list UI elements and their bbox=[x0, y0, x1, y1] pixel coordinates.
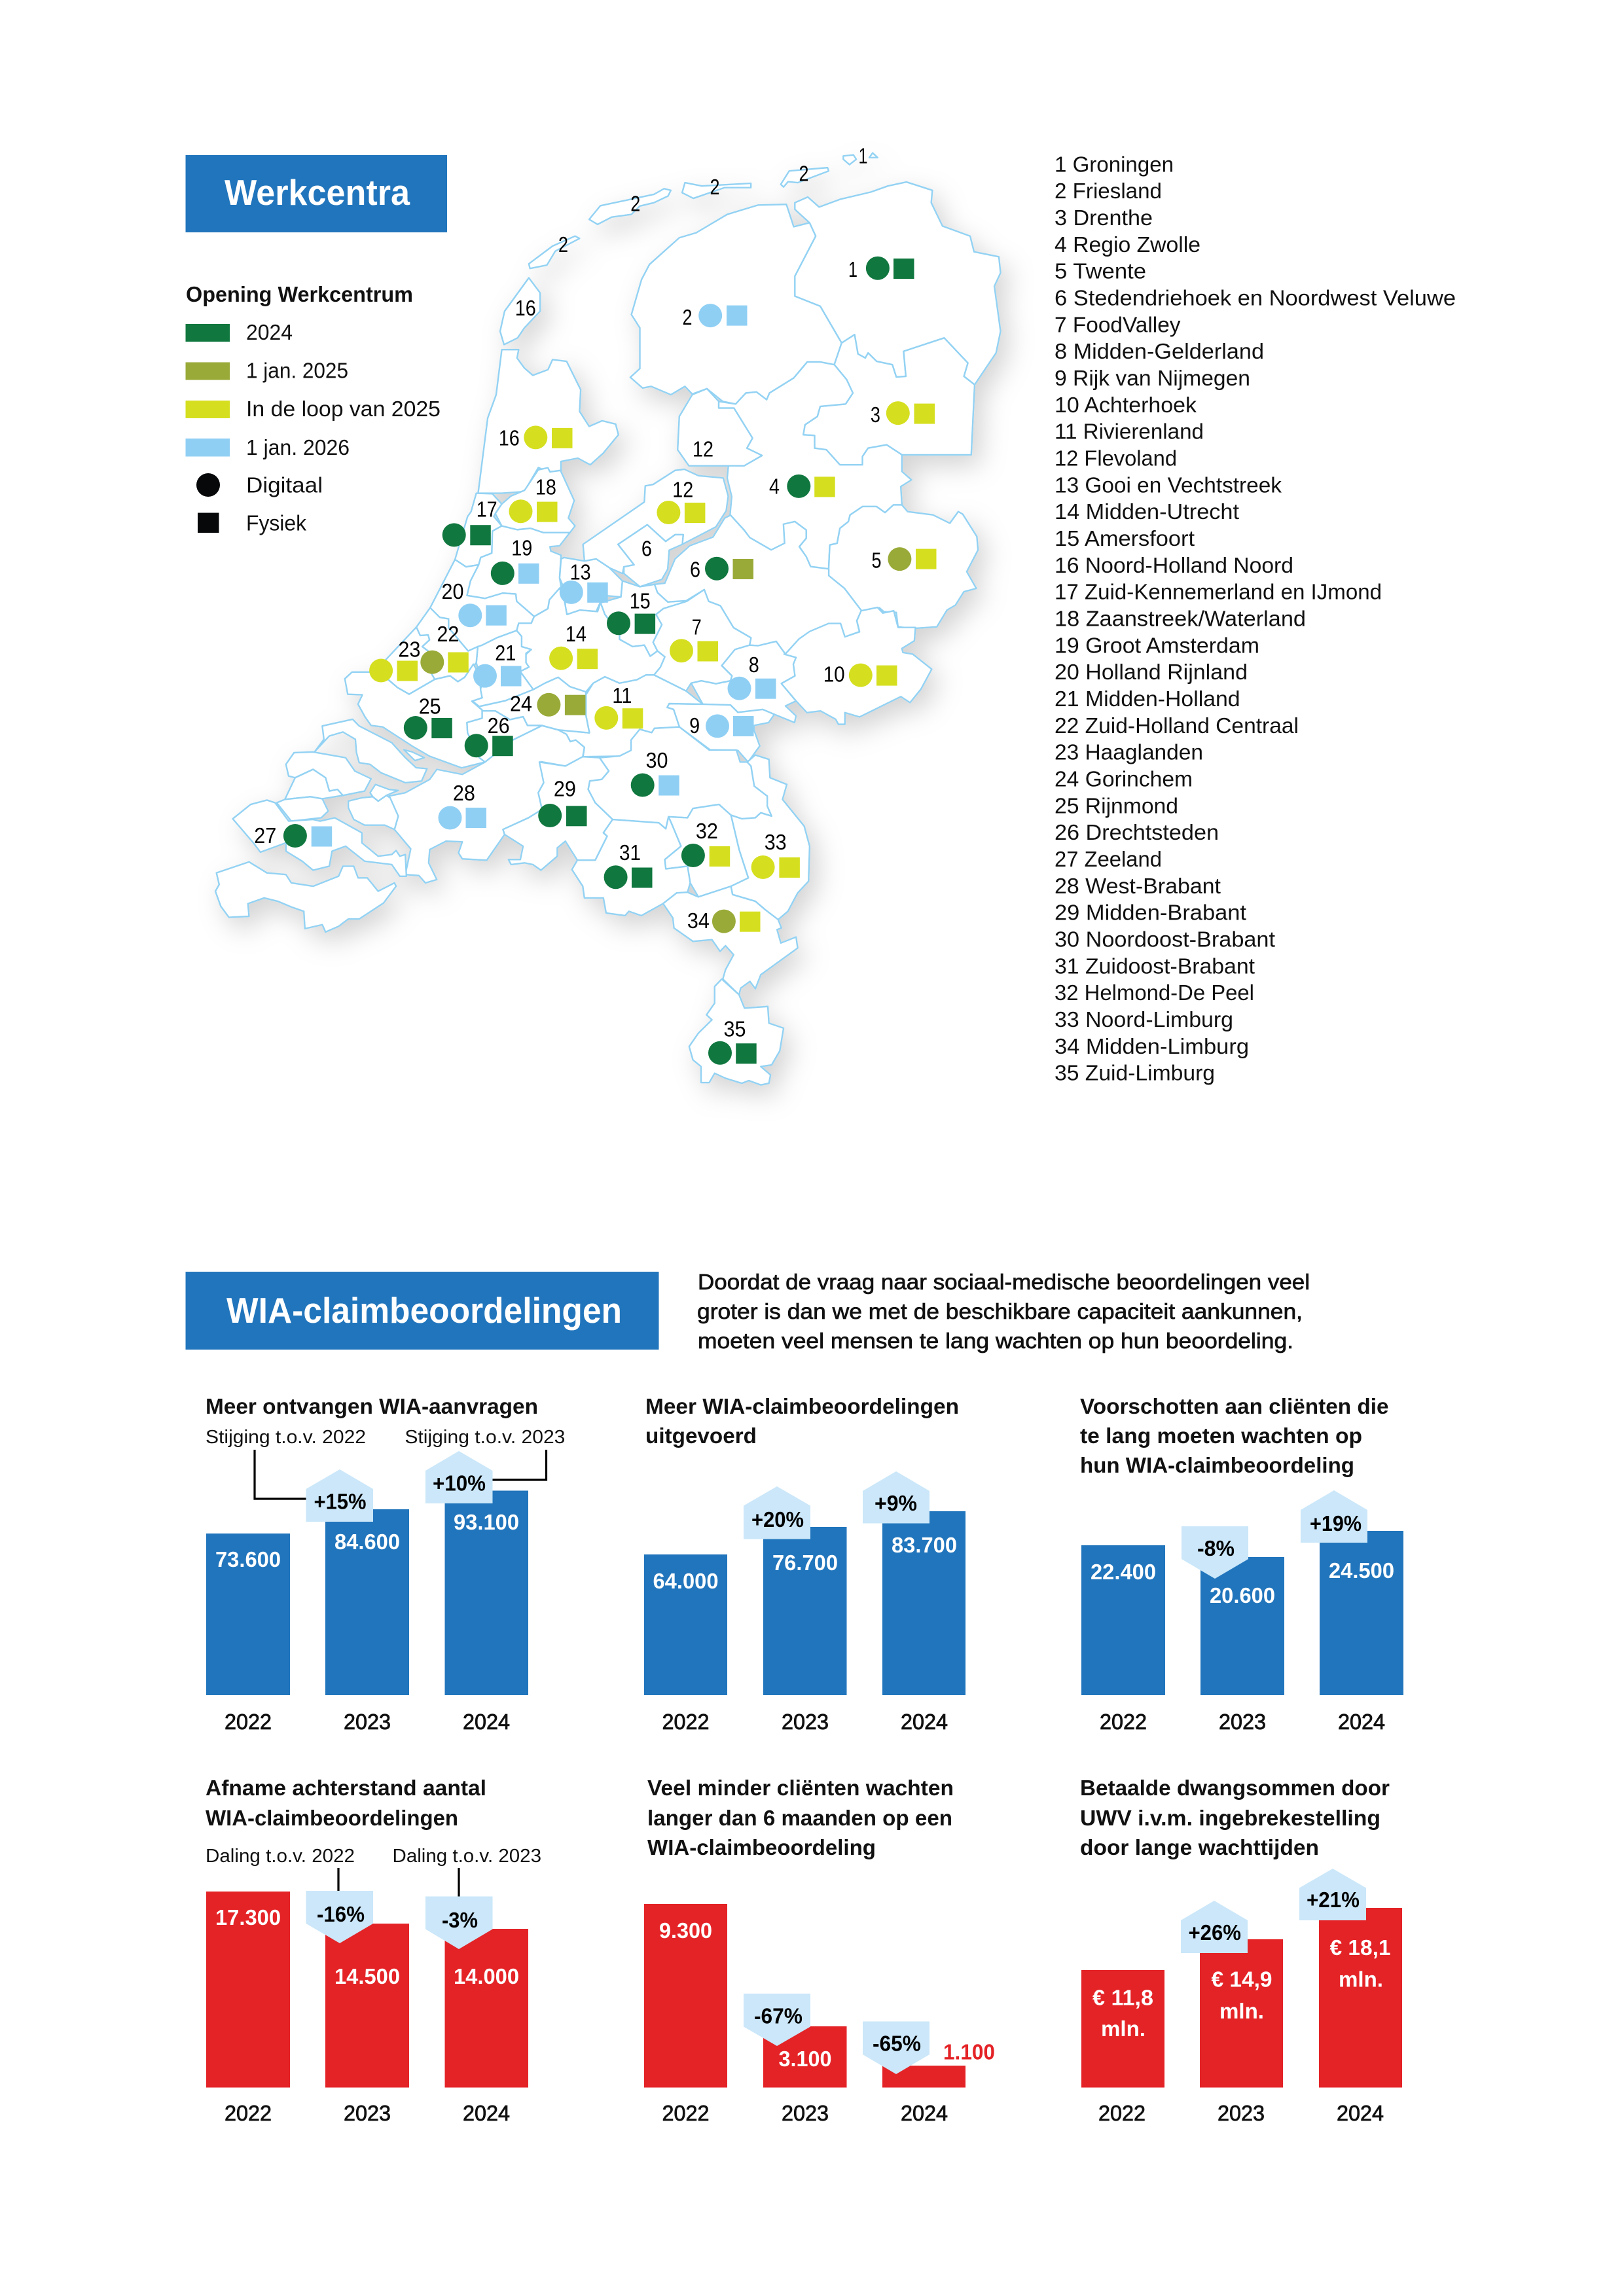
chart: Voorschotten aan cliënten: 20.600 bbox=[1210, 1583, 1275, 1607]
chart: Veel minder cliënten wachten langer dan 6 maanden: 2022 bbox=[662, 2101, 710, 2125]
chart: Afname achterstand aantal WIA-claimbeoordelingen: Daling t.o.v. 2022 bbox=[206, 1846, 355, 1867]
region: Flevoland zuid bbox=[583, 469, 729, 573]
numbered list of regions: 4 Regio Zwolle bbox=[1055, 232, 1200, 257]
marker 20 Holland Rijnland: 20 bbox=[441, 579, 463, 603]
marker 23 Haaglanden bbox=[369, 637, 420, 682]
region: Drenthe bbox=[803, 334, 975, 465]
chart: Voorschotten aan cliënten: 2024 bbox=[1338, 1710, 1385, 1734]
chart: Veel minder cliënten wachten langer dan 6 maanden: 3.100 bbox=[779, 2047, 831, 2071]
chart: Betaalde dwangsommen door UWV: 2022 bbox=[1098, 2101, 1146, 2125]
numbered list of regions: 3 Drenthe bbox=[1055, 206, 1153, 230]
region: Noord-Beveland bbox=[285, 770, 343, 799]
chart: Voorschotten aan cliënten: 2023 bbox=[1219, 1710, 1266, 1734]
region: Midden-Utrecht bbox=[516, 588, 665, 692]
map of the Netherlands: regions bbox=[215, 153, 1001, 1085]
numbered list of regions: 28 West-Brabant bbox=[1055, 874, 1221, 898]
numbered list of regions: 18 Zaanstreek/Waterland bbox=[1055, 606, 1306, 631]
numbered list of regions: 7 FoodValley bbox=[1055, 312, 1181, 336]
region: FoodValley bbox=[653, 590, 751, 691]
marker 30 Noordoost-Brabant bbox=[631, 748, 679, 797]
marker 5 Twente: 5 bbox=[872, 548, 881, 572]
marker 4 Regio Zwolle: 4 bbox=[769, 474, 780, 499]
marker 2 Friesland bbox=[682, 304, 748, 329]
chart: Betaalde dwangsommen door UWV: UWV i.v.m. ingebrekestelling bbox=[1080, 1806, 1380, 1830]
legend: Opening Werkcentrum: Fysiek bbox=[246, 511, 306, 535]
marker 3 Drenthe bbox=[871, 401, 935, 427]
legend: Opening Werkcentrum: 1 jan. 2026 bbox=[246, 435, 350, 459]
island labels: 1 and 2: 1 bbox=[859, 144, 868, 168]
region: Stedendriehoek, westelijk deel bbox=[618, 525, 683, 586]
numbered list of regions bbox=[1055, 152, 1456, 1085]
chart: Afname achterstand aantal WIA-claimbeoordelingen: 14.000 bbox=[454, 1964, 519, 1988]
region: Groot Amsterdam bbox=[467, 526, 570, 617]
region: Zuid-Limburg bbox=[689, 979, 784, 1085]
marker 17 Zuid-Kennemerland en IJmond: 17 bbox=[477, 497, 497, 521]
chart: Meer ontvangen WIA-aanvragen: +15% bbox=[314, 1490, 367, 1514]
chart: Betaalde dwangsommen door UWV: +26% bbox=[1189, 1920, 1241, 1945]
island: Vlieland bbox=[529, 236, 579, 268]
legend: Opening Werkcentrum: In de loop van 2025 bbox=[246, 397, 441, 421]
region: Midden-Holland bbox=[472, 630, 533, 706]
region: Flevoland noord bbox=[677, 389, 762, 466]
marker 25 Rijnmond: 25 bbox=[419, 694, 441, 719]
marker 33 Noord-Limburg: 33 bbox=[765, 830, 787, 854]
region: Rijk van Nijmegen bbox=[667, 704, 774, 762]
region: Sint Philipsland bbox=[370, 784, 398, 801]
island: Ameland bbox=[682, 183, 751, 198]
marker 22 Zuid-Holland Centraal bbox=[420, 622, 469, 674]
marker 1 Groningen: 1 bbox=[848, 257, 857, 281]
intro text: Doordat de vraag naar sociaal-medische beoordelingen veel bbox=[698, 1270, 1310, 1294]
chart: Veel minder cliënten wachten langer dan 6 maanden: 1.100 bbox=[943, 2040, 995, 2064]
chart: Betaalde dwangsommen door UWV: door lange wachttijden bbox=[1080, 1835, 1319, 1859]
marker 24 Gorinchem bbox=[510, 692, 585, 717]
heading: Werkcentra: Werkcentra bbox=[225, 172, 410, 213]
region: Zuid-Holland Centraal bbox=[416, 608, 478, 682]
marker 25 Rijnmond bbox=[404, 694, 452, 740]
chart: Afname achterstand aantal WIA-claimbeoordelingen: -3% bbox=[442, 1908, 478, 1932]
marker 13 Gooi en Vechtstreek: 13 bbox=[570, 560, 591, 584]
marker 26 Drechtsteden bbox=[465, 713, 513, 757]
region: Regio Zwolle bbox=[719, 362, 912, 569]
marker 23 Haaglanden: 23 bbox=[398, 637, 420, 662]
numbered list of regions: 12 Flevoland bbox=[1055, 446, 1177, 470]
chart: Voorschotten aan cliënten: -8% bbox=[1197, 1536, 1235, 1560]
chart: Veel minder cliënten wachten langer dan 6 maanden: -65% bbox=[873, 2032, 921, 2056]
region: Twente bbox=[829, 505, 978, 628]
chart: Meer WIA-claimbeoordelingen uitgevoerd: +9% bbox=[875, 1491, 917, 1515]
marker 9 Rijk van Nijmegen: 9 bbox=[689, 713, 700, 738]
marker 19 Groot Amsterdam: 19 bbox=[511, 536, 532, 560]
region: Walcheren en Zuid-Beveland bbox=[233, 800, 406, 876]
region: Gooi en Vechtstreek bbox=[560, 558, 623, 615]
marker 28 West-Brabant bbox=[439, 781, 486, 830]
chart: Veel minder cliënten wachten langer dan 6 maanden bbox=[644, 1776, 995, 2125]
chart: Meer ontvangen WIA-aanvragen: 2022 bbox=[225, 1710, 272, 1734]
marker 15 Amersfoort bbox=[607, 589, 655, 635]
marker 14 Midden-Utrecht: 14 bbox=[566, 622, 586, 646]
chart: Afname achterstand aantal WIA-claimbeoordelingen: 2024 bbox=[463, 2101, 510, 2125]
marker 19 Groot Amsterdam bbox=[491, 536, 539, 585]
marker 16 Noord-Holland Noord bbox=[499, 425, 572, 450]
chart: Meer ontvangen WIA-aanvragen: 73.600 bbox=[215, 1547, 281, 1571]
numbered list of regions: 34 Midden-Limburg bbox=[1055, 1034, 1249, 1058]
chart: Betaalde dwangsommen door UWV: 2023 bbox=[1218, 2101, 1265, 2125]
marker 33 Noord-Limburg bbox=[751, 830, 800, 879]
marker 30 Noordoost-Brabant: 30 bbox=[645, 748, 668, 772]
marker 29 Midden-Brabant bbox=[538, 776, 586, 827]
marker 10 Achterhoek: 10 bbox=[823, 662, 845, 686]
numbered list of regions: 16 Noord-Holland Noord bbox=[1055, 553, 1293, 577]
chart: Meer WIA-claimbeoordelingen uitgevoerd: 2023 bbox=[782, 1710, 829, 1734]
chart: Meer WIA-claimbeoordelingen uitgevoerd: 2022 bbox=[662, 1710, 710, 1734]
numbered list of regions: 29 Midden-Brabant bbox=[1055, 901, 1246, 925]
chart: Meer ontvangen WIA-aanvragen: 2023 bbox=[344, 1710, 391, 1734]
marker 18 Zaanstreek/Waterland bbox=[509, 475, 558, 523]
island in the Oude Maas bbox=[404, 750, 424, 761]
marker 9 Rijk van Nijmegen bbox=[689, 713, 754, 738]
region: Noordoost-Brabant bbox=[588, 727, 772, 829]
marker 15 Amersfoort: 15 bbox=[630, 589, 651, 613]
marker 21 Midden-Holland: 21 bbox=[495, 641, 516, 665]
region: Midden-Limburg bbox=[663, 886, 798, 995]
chart: Meer WIA-claimbeoordelingen uitgevoerd: 2024 bbox=[901, 1710, 948, 1734]
numbered list of regions: 8 Midden-Gelderland bbox=[1055, 339, 1264, 363]
intro text: groter is dan we met de beschikbare capaciteit aankunnen, bbox=[697, 1299, 1303, 1323]
island labels: 1 and 2: 2 bbox=[799, 161, 809, 186]
marker 31 Zuidoost-Brabant bbox=[604, 840, 652, 889]
chart: Meer WIA-claimbeoordelingen uitgevoerd: 83.700 bbox=[892, 1533, 957, 1557]
numbered list of regions: 27 Zeeland bbox=[1055, 847, 1162, 871]
marker 8 Midden-Gelderland bbox=[728, 653, 776, 700]
chart: Betaalde dwangsommen door UWV: mln. bbox=[1339, 1967, 1383, 1992]
chart: Betaalde dwangsommen door UWV: 2024 bbox=[1337, 2101, 1384, 2125]
island labels: 1 and 2: 12 bbox=[693, 437, 713, 461]
marker 26 Drechtsteden: 26 bbox=[488, 713, 510, 738]
marker 10 Achterhoek bbox=[823, 662, 897, 687]
region: Haaglanden bbox=[370, 627, 435, 694]
heading: WIA-claimbeoordelingen bbox=[186, 1272, 659, 1350]
region: Holland Rijnland bbox=[430, 560, 534, 651]
island labels: 1 and 2: 2 bbox=[710, 175, 720, 199]
chart: Meer ontvangen WIA-aanvragen: 93.100 bbox=[454, 1510, 519, 1534]
region: Noord-Limburg bbox=[731, 755, 810, 920]
numbered list of regions: 14 Midden-Utrecht bbox=[1055, 499, 1239, 524]
chart: Veel minder cliënten wachten langer dan 6 maanden: 9.300 bbox=[659, 1918, 712, 1943]
marker 27 Zeeland: 27 bbox=[254, 823, 276, 848]
chart: Meer WIA-claimbeoordelingen uitgevoerd: +20% bbox=[751, 1507, 804, 1532]
numbered list of regions: 32 Helmond-De Peel bbox=[1055, 980, 1254, 1005]
region: Stedendriehoek en Noordwest Veluwe bbox=[655, 515, 861, 655]
chart: Meer WIA-claimbeoordelingen uitgevoerd: 76.700 bbox=[772, 1551, 838, 1575]
numbered list of regions: 1 Groningen bbox=[1055, 152, 1174, 176]
region: Schouwen-Duiveland bbox=[286, 752, 371, 795]
chart: Betaalde dwangsommen door UWV: mln. bbox=[1219, 1999, 1264, 2023]
chart: Afname achterstand aantal WIA-claimbeoordelingen: 2022 bbox=[225, 2101, 272, 2125]
chart: Voorschotten aan cliënten bbox=[1080, 1394, 1403, 1734]
region: Noord-Holland Noord bbox=[478, 350, 619, 493]
chart: Meer ontvangen WIA-aanvragen: Meer ontvangen WIA-aanvragen bbox=[206, 1394, 538, 1418]
marker 34 Midden-Limburg: 34 bbox=[687, 908, 710, 933]
legend: Opening Werkcentrum: 2024 bbox=[246, 320, 293, 344]
region: Zuid-Kennemerland en IJmond bbox=[455, 493, 502, 567]
marker 2 Friesland: 2 bbox=[682, 305, 693, 329]
island: Rottumerplaat bbox=[869, 153, 878, 158]
region: Midden-Brabant bbox=[503, 757, 613, 870]
marker 14 Midden-Utrecht bbox=[549, 622, 598, 670]
heading: Werkcentra bbox=[186, 155, 447, 232]
marker 34 Midden-Limburg bbox=[687, 908, 761, 933]
island: Texel bbox=[500, 278, 540, 345]
region: West-Brabant bbox=[389, 726, 585, 883]
chart: Afname achterstand aantal WIA-claimbeoordelingen: Daling t.o.v. 2023 bbox=[393, 1846, 541, 1867]
chart: Afname achterstand aantal WIA-claimbeoordelingen: 17.300 bbox=[215, 1905, 281, 1929]
marker 6 Stedendriehoek en Noordwest Veluwe: 6 bbox=[690, 558, 700, 582]
chart: Betaalde dwangsommen door UWV: Betaalde dwangsommen door bbox=[1080, 1776, 1390, 1800]
region: Zeeuws-Vlaanderen bbox=[215, 862, 396, 932]
numbered list of regions: 35 Zuid-Limburg bbox=[1055, 1061, 1215, 1085]
region: Goeree-Overflakkee bbox=[315, 719, 427, 783]
chart: Afname achterstand aantal WIA-claimbeoordelingen: Afname achterstand aantal bbox=[206, 1776, 486, 1800]
marker 16 Noord-Holland Noord: 16 bbox=[499, 426, 520, 450]
chart: Voorschotten aan cliënten: +19% bbox=[1310, 1511, 1362, 1535]
chart: Meer WIA-claimbeoordelingen uitgevoerd: uitgevoerd bbox=[645, 1424, 757, 1448]
numbered list of regions: 25 Rijnmond bbox=[1055, 793, 1178, 817]
numbered list of regions: 2 Friesland bbox=[1055, 179, 1162, 203]
chart: Afname achterstand aantal WIA-claimbeoordelingen: 14.500 bbox=[334, 1964, 400, 1988]
chart: Meer WIA-claimbeoordelingen uitgevoerd: Meer WIA-claimbeoordelingen bbox=[645, 1394, 959, 1418]
chart: Veel minder cliënten wachten langer dan 6 maanden: WIA-claimbeoordeling bbox=[647, 1835, 876, 1859]
numbered list of regions: 19 Groot Amsterdam bbox=[1055, 633, 1259, 657]
chart: Meer ontvangen WIA-aanvragen: Stijging t.o.v. 2023 bbox=[405, 1427, 565, 1448]
chart: Meer ontvangen WIA-aanvragen: +10% bbox=[433, 1471, 486, 1495]
legend: Opening Werkcentrum: Opening Werkcentrum bbox=[186, 282, 413, 306]
island: Rottumeroog bbox=[843, 155, 856, 165]
numbered list of regions: 6 Stedendriehoek en Noordwest Veluwe bbox=[1055, 285, 1456, 310]
chart: Veel minder cliënten wachten langer dan 6 maanden: 2023 bbox=[782, 2101, 829, 2125]
marker 35 Zuid-Limburg: 35 bbox=[724, 1017, 746, 1041]
marker 31 Zuidoost-Brabant: 31 bbox=[619, 840, 641, 865]
chart: Voorschotten aan cliënten: hun WIA-claimbeoordeling bbox=[1080, 1453, 1354, 1477]
chart: Betaalde dwangsommen door UWV: +21% bbox=[1307, 1888, 1360, 1912]
region: Rivierenland bbox=[558, 675, 703, 757]
marker 4 Regio Zwolle bbox=[769, 474, 835, 499]
chart: Meer WIA-claimbeoordelingen uitgevoerd: 64.000 bbox=[653, 1569, 719, 1593]
island labels: 1 and 2: 2 bbox=[630, 191, 640, 215]
region: Groningen bbox=[795, 182, 1001, 385]
region: Zuidoost-Brabant bbox=[572, 817, 690, 916]
legend: Opening Werkcentrum bbox=[186, 282, 441, 535]
chart: Afname achterstand aantal WIA-claimbeoordelingen: WIA-claimbeoordelingen bbox=[206, 1806, 458, 1830]
marker 20 Holland Rijnland bbox=[441, 579, 507, 627]
numbered list of regions: 13 Gooi en Vechtstreek bbox=[1055, 473, 1282, 497]
marker 11 Rivierenland bbox=[594, 683, 643, 730]
marker 18 Zaanstreek/Waterland: 18 bbox=[535, 475, 556, 499]
island: Terschelling bbox=[589, 188, 671, 224]
marker 8 Midden-Gelderland: 8 bbox=[749, 653, 759, 677]
marker 35 Zuid-Limburg bbox=[708, 1017, 757, 1065]
island labels: 1 and 2: 16 bbox=[515, 296, 536, 320]
region: Drechtsteden bbox=[467, 711, 542, 762]
chart: Voorschotten aan cliënten: Voorschotten aan cliënten die bbox=[1080, 1394, 1389, 1418]
intro text bbox=[697, 1270, 1310, 1353]
region: Midden-Gelderland bbox=[691, 641, 797, 723]
legend: Opening Werkcentrum: Digitaal bbox=[246, 473, 323, 497]
numbered list of regions: 33 Noord-Limburg bbox=[1055, 1007, 1233, 1031]
chart: Voorschotten aan cliënten: 22.400 bbox=[1091, 1560, 1156, 1584]
numbered list of regions: 15 Amersfoort bbox=[1055, 526, 1195, 550]
marker 29 Midden-Brabant: 29 bbox=[554, 776, 576, 801]
chart: Meer ontvangen WIA-aanvragen: 84.600 bbox=[334, 1530, 400, 1554]
chart: Veel minder cliënten wachten langer dan 6 maanden: langer dan 6 maanden op een bbox=[647, 1806, 952, 1830]
chart: Afname achterstand aantal WIA-claimbeoordelingen bbox=[206, 1776, 541, 2125]
chart: Meer ontvangen WIA-aanvragen bbox=[206, 1394, 565, 1734]
marker 5 Twente bbox=[872, 547, 936, 572]
numbered list of regions: 17 Zuid-Kennemerland en IJmond bbox=[1055, 580, 1382, 604]
region: Achterhoek bbox=[782, 607, 931, 725]
intro text: moeten veel mensen te lang wachten op hun beoordeling. bbox=[698, 1329, 1293, 1353]
marker 13 Gooi en Vechtstreek bbox=[560, 560, 608, 604]
chart: Veel minder cliënten wachten langer dan 6 maanden: 2024 bbox=[901, 2101, 948, 2125]
chart: Betaalde dwangsommen door UWV bbox=[1080, 1776, 1402, 2125]
numbered list of regions: 11 Rivierenland bbox=[1055, 420, 1204, 444]
region: Zaanstreek/Waterland bbox=[496, 468, 575, 533]
marker 27 Zeeland bbox=[254, 823, 332, 848]
chart: Meer ontvangen WIA-aanvragen: Stijging t.o.v. 2022 bbox=[206, 1427, 366, 1448]
chart: Betaalde dwangsommen door UWV: € 14,9 bbox=[1211, 1967, 1272, 1992]
region: Zeeland, middendeel bbox=[277, 797, 328, 821]
island labels: 1 and 2: 6 bbox=[641, 537, 652, 560]
marker 7 FoodValley bbox=[670, 615, 718, 662]
region: Tholen bbox=[348, 795, 398, 829]
heading: WIA-claimbeoordelingen: WIA-claimbeoordelingen bbox=[226, 1290, 622, 1331]
chart: Betaalde dwangsommen door UWV: mln. bbox=[1101, 2017, 1146, 2041]
marker 32 Helmond-De Peel: 32 bbox=[696, 819, 718, 843]
numbered list of regions: 10 Achterhoek bbox=[1055, 393, 1197, 417]
island: Schiermonnikoog bbox=[781, 168, 829, 187]
marker 11 Rivierenland: 11 bbox=[612, 683, 632, 708]
chart: Veel minder cliënten wachten langer dan 6 maanden: -67% bbox=[754, 2004, 803, 2028]
chart: Afname achterstand aantal WIA-claimbeoordelingen: 2023 bbox=[344, 2101, 391, 2125]
numbered list of regions: 31 Zuidoost-Brabant bbox=[1055, 954, 1255, 978]
island labels: 1 and 2: 2 bbox=[558, 232, 568, 257]
region: Rijnmond bbox=[345, 664, 485, 768]
chart: Voorschotten aan cliënten: 24.500 bbox=[1329, 1558, 1394, 1583]
marker 12 Flevoland: 12 bbox=[672, 477, 693, 501]
marker 1 Groningen bbox=[848, 257, 914, 281]
chart: Veel minder cliënten wachten langer dan 6 maanden: Veel minder cliënten wachten bbox=[647, 1776, 954, 1800]
numbered list of regions: 23 Haaglanden bbox=[1055, 740, 1203, 764]
region: Helmond-De Peel bbox=[664, 804, 748, 897]
chart: Afname achterstand aantal WIA-claimbeoordelingen: -16% bbox=[317, 1902, 365, 1926]
marker 21 Midden-Holland bbox=[473, 641, 521, 688]
marker 17 Zuid-Kennemerland en IJmond bbox=[442, 497, 497, 547]
marker 32 Helmond-De Peel bbox=[681, 819, 730, 867]
numbered list of regions: 20 Holland Rijnland bbox=[1055, 660, 1248, 684]
numbered list of regions: 22 Zuid-Holland Centraal bbox=[1055, 713, 1299, 738]
numbered list of regions: 9 Rijk van Nijmegen bbox=[1055, 366, 1250, 390]
marker 24 Gorinchem: 24 bbox=[510, 692, 532, 716]
marker 7 FoodValley: 7 bbox=[692, 615, 702, 639]
numbered list of regions: 5 Twente bbox=[1055, 259, 1146, 283]
chart: Voorschotten aan cliënten: te lang moeten wachten op bbox=[1080, 1424, 1362, 1448]
numbered list of regions: 24 Gorinchem bbox=[1055, 767, 1193, 791]
marker 22 Zuid-Holland Centraal: 22 bbox=[437, 622, 459, 646]
numbered list of regions: 21 Midden-Holland bbox=[1055, 687, 1240, 711]
marker 12 Flevoland bbox=[657, 477, 705, 524]
legend: Opening Werkcentrum: 1 jan. 2025 bbox=[246, 359, 348, 382]
chart: Betaalde dwangsommen door UWV: € 11,8 bbox=[1092, 1986, 1153, 2010]
island labels: 1 and 2 bbox=[515, 144, 868, 560]
marker 6 Stedendriehoek en Noordwest Veluwe bbox=[690, 557, 753, 582]
chart: Voorschotten aan cliënten: 2022 bbox=[1100, 1710, 1147, 1734]
chart: Meer WIA-claimbeoordelingen uitgevoerd bbox=[644, 1394, 965, 1734]
marker 3 Drenthe: 3 bbox=[871, 403, 880, 427]
region: Amersfoort bbox=[600, 581, 687, 656]
chart: Meer ontvangen WIA-aanvragen: 2024 bbox=[463, 1710, 510, 1734]
numbered list of regions: 30 Noordoost-Brabant bbox=[1055, 927, 1275, 952]
numbered list of regions: 26 Drechtsteden bbox=[1055, 820, 1219, 844]
marker 28 West-Brabant: 28 bbox=[453, 781, 475, 805]
region: Friesland bbox=[630, 204, 842, 404]
region: Gorinchem bbox=[472, 677, 589, 733]
chart: Betaalde dwangsommen door UWV: € 18,1 bbox=[1330, 1935, 1390, 1960]
